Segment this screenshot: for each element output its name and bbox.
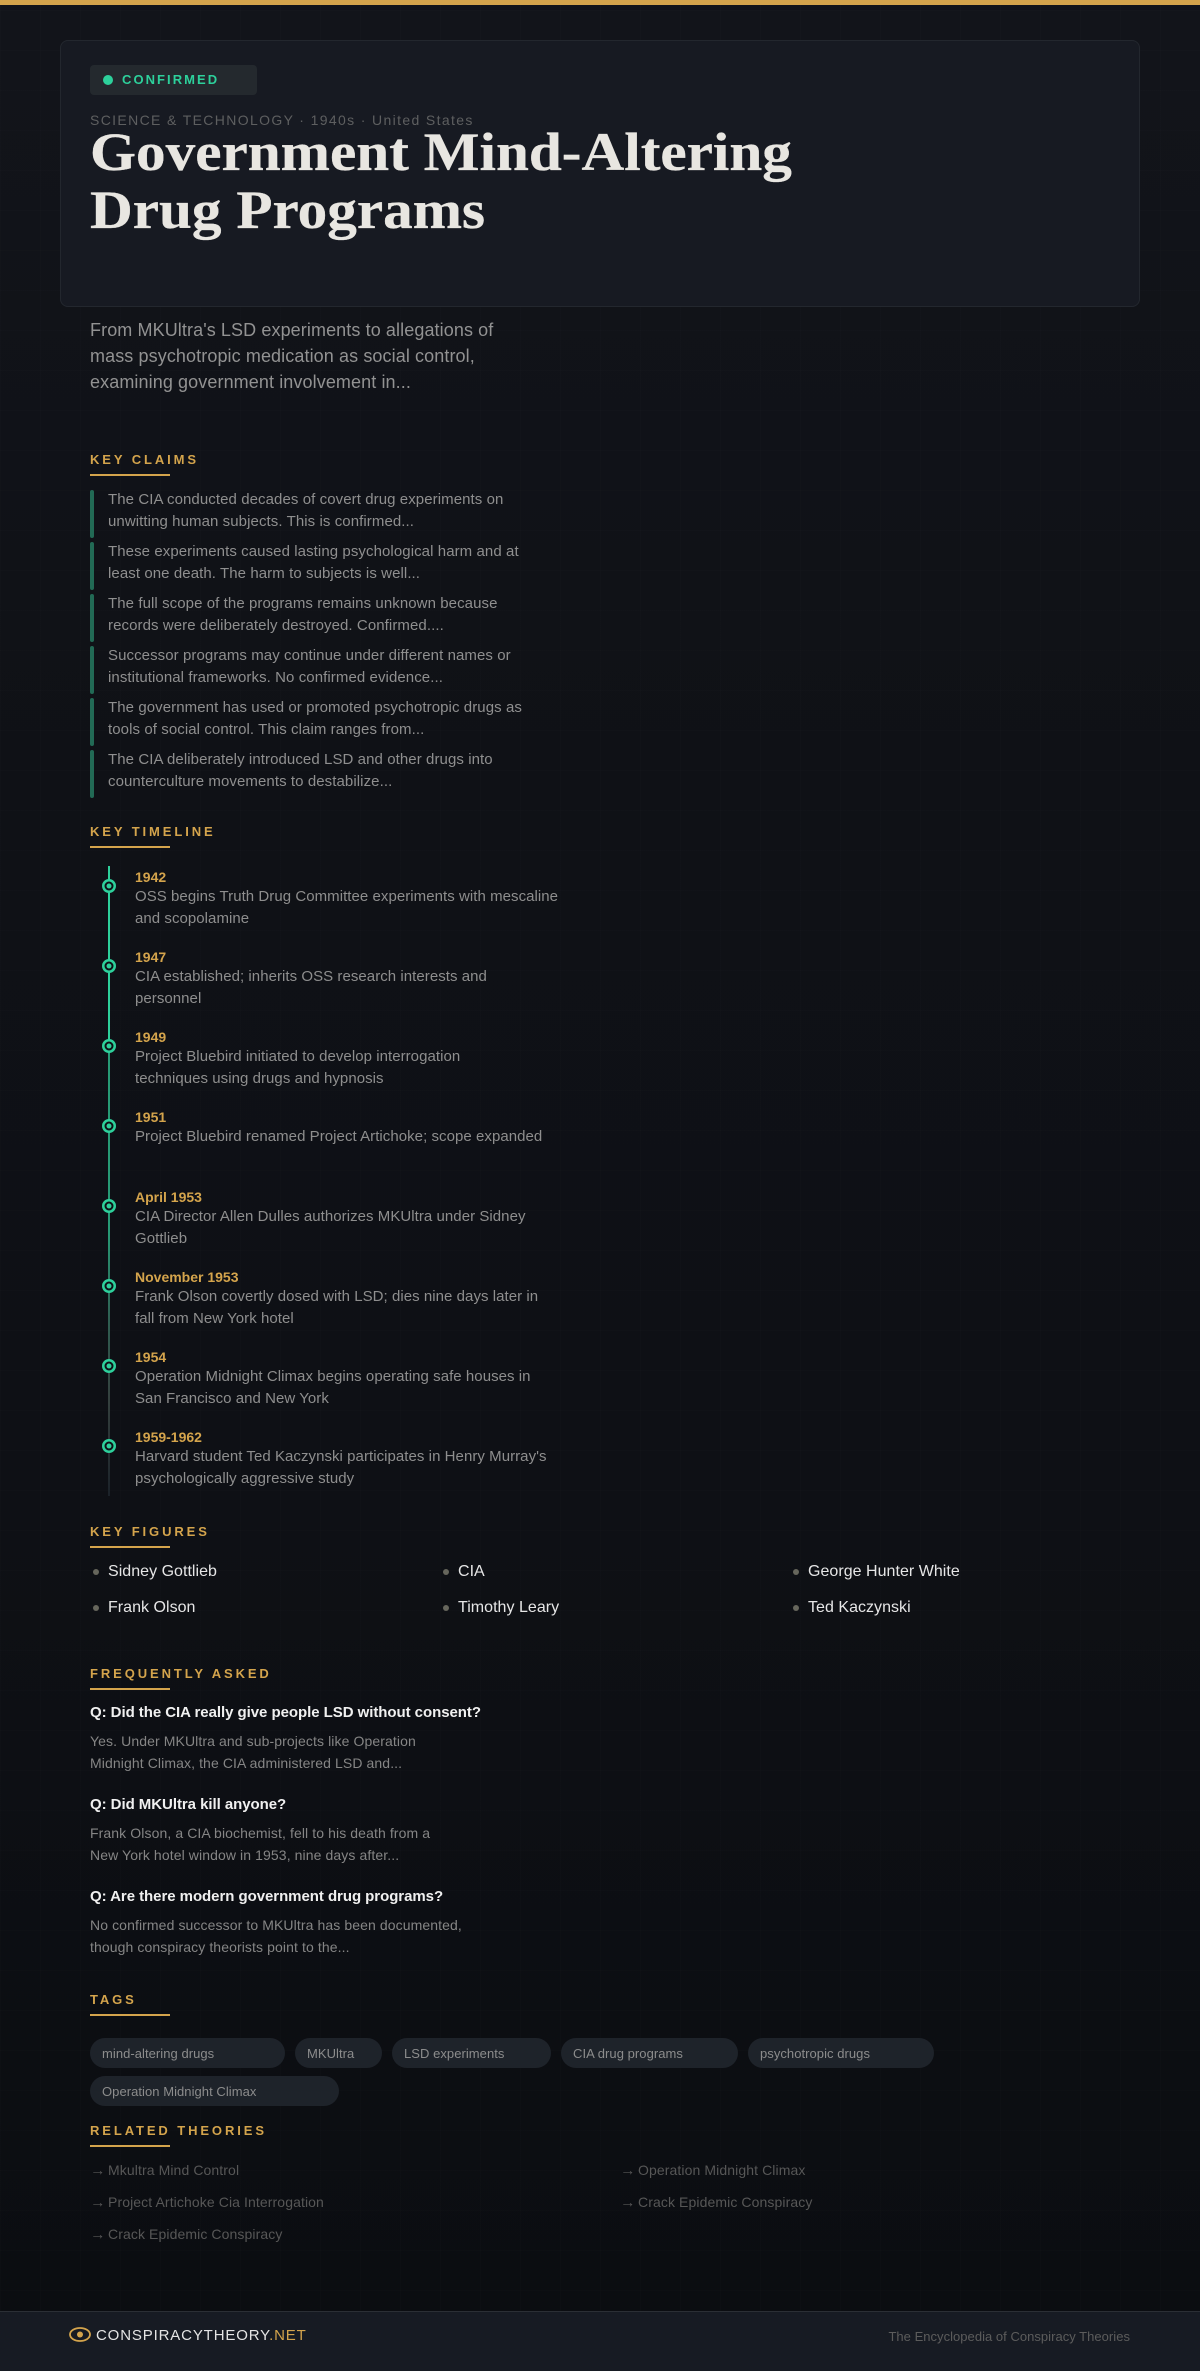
event 1954	[102, 1349, 531, 1407]
event 1942: 1942	[135, 869, 166, 885]
claim 1	[90, 490, 503, 538]
FAQ item 1: Q: Did the CIA really give people LSD without consent?	[90, 1704, 481, 1721]
related link: Crack Epidemic Conspiracy	[638, 2194, 812, 2210]
claim 6	[90, 750, 493, 798]
event November 1953: fall from New York hotel	[135, 1310, 294, 1327]
heading: tags: TAGS	[90, 1992, 137, 2007]
tag: mind-altering drugs	[102, 2046, 214, 2061]
related link: →	[620, 2194, 635, 2210]
related link: Operation Midnight Climax	[638, 2162, 805, 2178]
timeline spine	[108, 866, 110, 1496]
related link	[620, 2192, 850, 2212]
claim 3	[90, 594, 498, 642]
intro description: examining government involvement in...	[90, 372, 411, 392]
panel: key claims list	[90, 490, 522, 798]
tag: psychotropic drugs	[760, 2046, 870, 2061]
FAQ item 3: No confirmed successor to MKUltra has been documented,	[90, 1917, 462, 1933]
related link: →	[620, 2162, 635, 2178]
event November 1953	[102, 1269, 538, 1327]
claim 1: unwitting human subjects. This is confirmed...	[108, 513, 414, 530]
tag	[392, 2038, 551, 2068]
footer tagline: The Encyclopedia of Conspiracy Theories	[888, 2329, 1130, 2344]
icon: eye logo	[69, 2327, 91, 2342]
event 1951: Project Bluebird renamed Project Artichoke; scope expanded	[135, 1128, 542, 1145]
panel: timeline	[102, 866, 558, 1496]
panel: FAQ	[90, 1704, 481, 1955]
title: Drug Programs	[90, 180, 485, 240]
FAQ item 1: Midnight Climax, the CIA administered LSD and...	[90, 1755, 402, 1771]
FAQ item 2: Q: Did MKUltra kill anyone?	[90, 1796, 286, 1813]
FAQ item 1	[90, 1704, 481, 1771]
FAQ item 1: Yes. Under MKUltra and sub-projects like Operation	[90, 1733, 416, 1749]
intro description: From MKUltra's LSD experiments to allegations of	[90, 320, 493, 340]
event 1947: personnel	[135, 990, 201, 1007]
tag: CIA drug programs	[573, 2046, 683, 2061]
panel: related theories links	[90, 2162, 812, 2242]
event April 1953: Gottlieb	[135, 1230, 187, 1247]
panel: hero header	[60, 40, 1140, 307]
claim 2	[90, 542, 519, 590]
event 1942: and scopolamine	[135, 910, 249, 927]
event 1959-1962: Harvard student Ted Kaczynski participates in Henry Murray's	[135, 1448, 547, 1465]
footer	[0, 2311, 1200, 2371]
event 1949: techniques using drugs and hypnosis	[135, 1070, 384, 1087]
FAQ item 3: though conspiracy theorists point to the...	[90, 1939, 350, 1955]
figure: George Hunter White: George Hunter White	[808, 1563, 960, 1580]
event 1942	[102, 869, 558, 927]
claim 4	[90, 646, 511, 694]
intro description	[90, 320, 494, 392]
figure: Timothy Leary: Timothy Leary	[458, 1599, 559, 1616]
top accent bar	[0, 0, 1200, 5]
heading: key figures: KEY FIGURES	[90, 1524, 210, 1539]
claim 4: institutional frameworks. No confirmed evidence...	[108, 669, 443, 686]
event 1947: 1947	[135, 949, 166, 965]
event 1949: Project Bluebird initiated to develop interrogation	[135, 1048, 460, 1065]
tag: MKUltra	[307, 2046, 354, 2061]
event 1954: San Francisco and New York	[135, 1390, 329, 1407]
event 1949: 1949	[135, 1029, 166, 1045]
figure: Sidney Gottlieb: Sidney Gottlieb	[108, 1563, 217, 1580]
event 1954: Operation Midnight Climax begins operating safe houses in	[135, 1368, 531, 1385]
claim 4: Successor programs may continue under different names or	[108, 647, 511, 664]
claim 6: The CIA deliberately introduced LSD and other drugs into	[108, 751, 493, 768]
intro description: mass psychotropic medication as social control,	[90, 346, 475, 366]
event 1942: OSS begins Truth Drug Committee experiments with mescaline	[135, 888, 558, 905]
event 1947	[102, 949, 487, 1007]
event 1951: 1951	[135, 1109, 166, 1125]
icon: status dot	[103, 75, 113, 85]
claim 5: tools of social control. This claim ranges from...	[108, 721, 424, 738]
claim 3: The full scope of the programs remains unknown because	[108, 595, 498, 612]
title: Government Mind-Altering	[90, 122, 792, 182]
FAQ item 3	[90, 1888, 462, 1955]
event 1947: CIA established; inherits OSS research interests and	[135, 968, 487, 985]
event April 1953: CIA Director Allen Dulles authorizes MKUltra under Sidney	[135, 1208, 526, 1225]
claim 6: counterculture movements to destabilize...	[108, 773, 392, 790]
figure: CIA	[443, 1563, 485, 1580]
heading: related theories: RELATED THEORIES	[90, 2123, 267, 2138]
footer logo text: CONSPIRACYTHEORY.NET	[96, 2327, 307, 2344]
related link: Project Artichoke Cia Interrogation	[108, 2194, 324, 2210]
figure: Frank Olson: Frank Olson	[108, 1599, 195, 1616]
related link	[90, 2224, 390, 2244]
FAQ item 2: New York hotel window in 1953, nine days after...	[90, 1847, 399, 1863]
claim 2: least one death. The harm to subjects is well...	[108, 565, 420, 582]
event November 1953: Frank Olson covertly dosed with LSD; dies nine days later in	[135, 1288, 538, 1305]
tag: LSD experiments	[404, 2046, 504, 2061]
figure: Ted Kaczynski: Ted Kaczynski	[808, 1599, 911, 1616]
panel: key figures grid	[93, 1563, 960, 1616]
claim 5	[90, 698, 522, 746]
FAQ item 2: Frank Olson, a CIA biochemist, fell to his death from a	[90, 1825, 430, 1841]
related link: →	[90, 2194, 105, 2210]
FAQ item 2	[90, 1796, 430, 1863]
related link: Crack Epidemic Conspiracy	[108, 2226, 282, 2242]
event 1959-1962: 1959-1962	[135, 1429, 202, 1445]
tag	[90, 2038, 285, 2068]
heading: key timeline: KEY TIMELINE	[90, 824, 216, 839]
claim 2: These experiments caused lasting psychological harm and at	[108, 543, 519, 560]
panel: tag pills	[90, 2038, 934, 2106]
tag	[561, 2038, 738, 2068]
event April 1953: April 1953	[135, 1189, 202, 1205]
badge label: CONFIRMED	[122, 72, 219, 87]
related link: →	[90, 2226, 105, 2242]
related link: Mkultra Mind Control	[108, 2162, 239, 2178]
category meta line: SCIENCE & TECHNOLOGY · 1940s · United States	[90, 112, 474, 128]
title	[90, 122, 792, 240]
event November 1953: November 1953	[135, 1269, 239, 1285]
event 1959-1962	[102, 1429, 547, 1487]
event 1951	[102, 1109, 542, 1145]
claim 5: The government has used or promoted psychotropic drugs as	[108, 699, 522, 716]
FAQ item 3: Q: Are there modern government drug programs?	[90, 1888, 443, 1905]
tag	[748, 2038, 934, 2068]
status badge: confirmed	[90, 65, 257, 95]
event 1959-1962: psychologically aggressive study	[135, 1470, 354, 1487]
heading: key claims: KEY CLAIMS	[90, 452, 199, 467]
event 1954: 1954	[135, 1349, 166, 1365]
tag: Operation Midnight Climax	[102, 2084, 256, 2099]
related link: →	[90, 2162, 105, 2178]
claim 1: The CIA conducted decades of covert drug experiments on	[108, 491, 503, 508]
event 1949	[102, 1029, 460, 1087]
claim 3: records were deliberately destroyed. Confirmed....	[108, 617, 444, 634]
heading: frequently asked: FREQUENTLY ASKED	[90, 1666, 272, 1681]
figure: CIA: CIA	[458, 1563, 485, 1580]
tag	[90, 2076, 339, 2106]
event April 1953	[102, 1189, 526, 1247]
tag	[295, 2038, 382, 2068]
